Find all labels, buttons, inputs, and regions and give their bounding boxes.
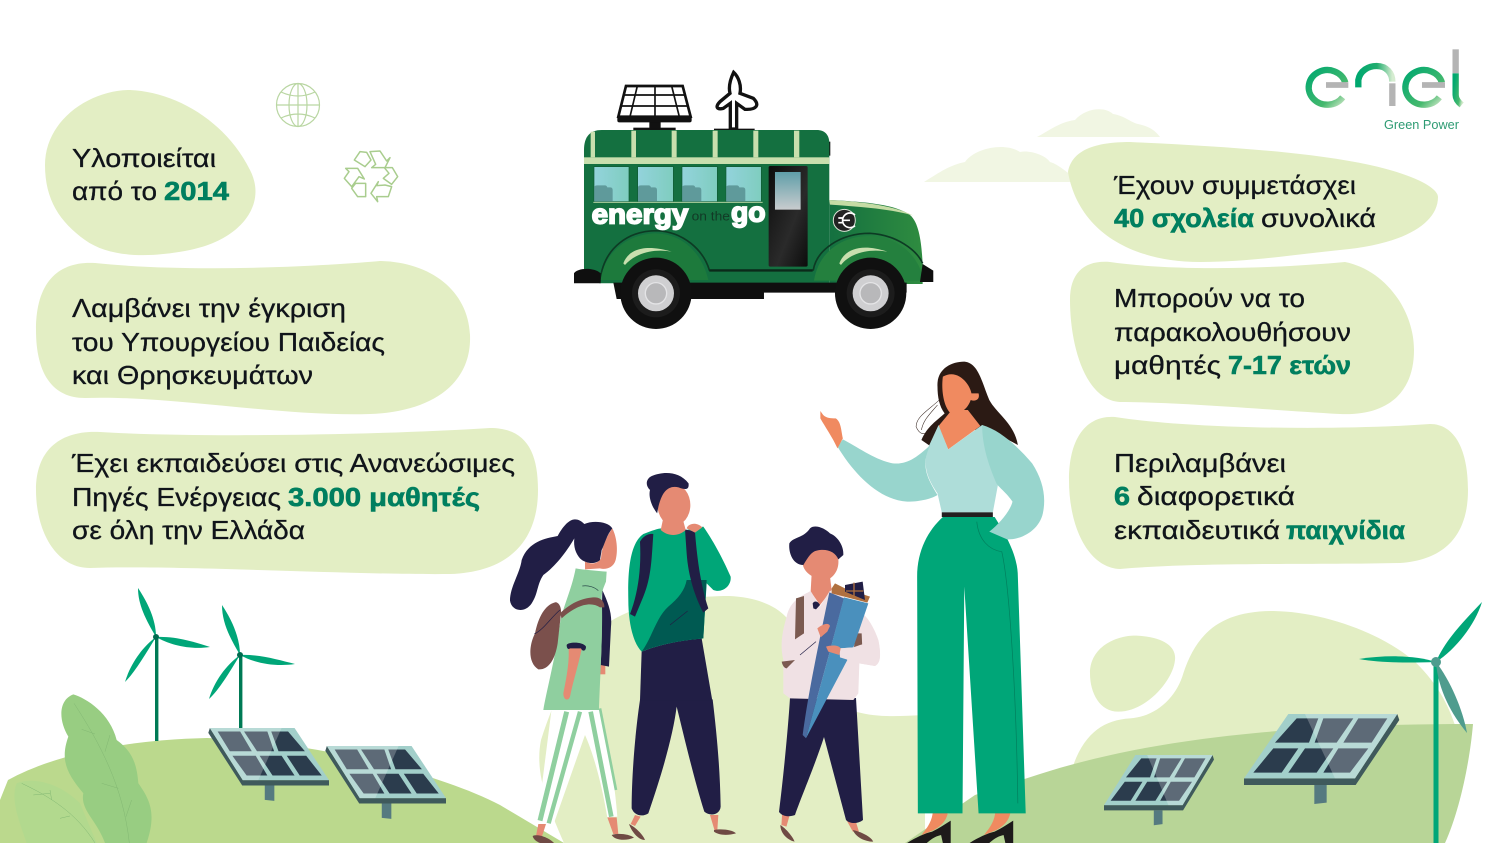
teacher feet: [907, 812, 1013, 843]
logo: enel Green Power: [1309, 49, 1462, 132]
panel: 6 games: [1069, 417, 1468, 569]
cloud upper: [1037, 109, 1160, 137]
teacher hair back: [921, 362, 1018, 447]
tall boy feet: [629, 815, 736, 840]
tall boy head: [647, 473, 690, 535]
tall boy sweater shade: [642, 580, 707, 652]
small panel: [1104, 755, 1214, 825]
text: 7-17 ετών: [1228, 350, 1351, 380]
right light blobs: [1072, 611, 1457, 777]
tall boy lower trousers: [632, 699, 721, 815]
text: από το: [72, 176, 157, 206]
teacher blouse: [926, 425, 998, 512]
teacher trousers: [917, 517, 1026, 813]
tall boy sweater: [628, 527, 731, 652]
bus lettering: [592, 197, 766, 229]
text: παρακολουθήσουν: [1114, 317, 1351, 347]
rear wheel: [620, 248, 692, 329]
bus door: [769, 166, 808, 267]
teacher hand: [820, 411, 843, 448]
blob: [36, 261, 470, 414]
icon: plug badge: [833, 209, 855, 231]
text: 6: [1114, 481, 1130, 511]
leaves: [14, 694, 152, 843]
small boy hair: [789, 527, 843, 565]
blob: [1069, 417, 1468, 569]
bus lettering: energy: [592, 198, 689, 229]
text: [1113, 170, 1376, 233]
small boy sleeve: [839, 640, 880, 666]
text: του Υπουργείου Παιδείας: [72, 327, 385, 357]
large panel: [1244, 714, 1399, 804]
front leaf: [61, 694, 152, 843]
text: Περιλαμβάνει: [1114, 448, 1286, 478]
panel A: [208, 728, 329, 801]
bus body: [584, 129, 923, 284]
blob: [45, 90, 255, 255]
logo tagline: Green Power: [1384, 118, 1459, 132]
text: [71, 448, 515, 545]
small boy hands: [817, 624, 841, 655]
right hill: [905, 724, 1473, 843]
small boy collar and straps: [782, 596, 862, 668]
text: Έχει εκπαιδεύσει στις Ανανεώσιμες: [71, 448, 515, 478]
left wind turbines: [125, 588, 295, 741]
girl arm: [563, 643, 586, 700]
background hills: [0, 596, 1473, 843]
text: Λαμβάνει την έγκριση: [72, 293, 346, 323]
bus chassis and bumpers: [574, 264, 933, 299]
bus lettering: on the: [692, 210, 730, 224]
girl shirt: [543, 568, 607, 710]
roof solar panel: [617, 86, 692, 130]
text: [1114, 283, 1351, 380]
small boy shirt: [782, 591, 880, 700]
teacher right arm: [982, 425, 1044, 539]
text: μαθητές: [1114, 350, 1221, 380]
tall boy upper trousers: [640, 638, 712, 701]
left hill: [0, 738, 564, 843]
tall boy backpack straps: [630, 529, 708, 617]
small boy trousers: [779, 698, 863, 823]
teacher belt: [942, 512, 993, 517]
text: εκπαιδευτικά: [1114, 515, 1280, 545]
left solar panels: [208, 728, 446, 819]
turbine 1: [125, 588, 210, 741]
teacher wisps: [916, 400, 939, 434]
legs and feet of girl and tall boy: [533, 699, 736, 843]
girl skin under jacket: [600, 665, 605, 674]
text: διαφορετικά: [1137, 481, 1295, 511]
text: Πηγές Ενέργειας: [72, 482, 281, 512]
gift boxes: [832, 582, 870, 603]
text: Υλοποιείται: [72, 143, 216, 173]
text: 3.000 μαθητές: [288, 482, 480, 512]
school cone: [803, 592, 868, 738]
text: σε όλη την Ελλάδα: [72, 515, 305, 545]
text: 2014: [164, 176, 230, 206]
girl backpack: [530, 597, 604, 669]
girl legs: [537, 708, 617, 825]
text: και Θρησκευμάτων: [72, 360, 313, 390]
small boy feet: [780, 813, 873, 842]
teacher neck and chest: [939, 410, 980, 449]
blob: [1070, 262, 1414, 414]
blob: [36, 428, 538, 574]
panel: 40 schools: [1068, 142, 1438, 262]
panel: 3000 students: [36, 428, 538, 574]
bus windows: [593, 167, 763, 202]
right wind turbine: [1359, 602, 1482, 843]
text: Έχουν συμμετάσχει: [1113, 170, 1356, 200]
panel: ministry approval: [36, 261, 470, 414]
roof wind turbine: [717, 72, 757, 129]
bus: energy on the go: [574, 72, 933, 329]
tall boy hand: [687, 524, 702, 533]
small boy upper body: [782, 527, 880, 738]
small boy face: [803, 549, 838, 581]
text: [72, 293, 385, 390]
teacher left arm: [837, 439, 937, 502]
clouds: [924, 109, 1160, 182]
text: Μπορούν να το: [1114, 283, 1305, 313]
girl feet: [533, 817, 634, 843]
small boy neck: [811, 573, 832, 605]
text: [1114, 448, 1405, 545]
front wheel: [835, 248, 906, 329]
text: συνολικά: [1261, 203, 1376, 233]
right solar panels: [1104, 714, 1399, 825]
text: 40 σχολεία: [1114, 203, 1254, 233]
bus lettering: go: [731, 197, 766, 228]
logo mark: [1309, 49, 1462, 106]
back leaf: [14, 781, 97, 843]
teacher: [820, 362, 1044, 843]
upper bodies of girl and tall boy: [510, 519, 731, 710]
teacher face: [942, 374, 979, 414]
people: [510, 362, 1044, 843]
icon: recycle: [344, 151, 398, 202]
light centre hill: [539, 596, 925, 843]
girl jacket: [601, 590, 611, 667]
cloud lower: [924, 147, 1082, 182]
panel: started in 2014: [45, 90, 255, 255]
turbine 2: [209, 605, 295, 730]
panel B: [325, 746, 446, 819]
text: παιχνίδια: [1286, 515, 1405, 545]
girl face and neck: [585, 528, 617, 569]
text: [72, 143, 230, 206]
panel: ages 7-17: [1070, 262, 1414, 414]
blob: [1068, 142, 1438, 262]
icon: globe: [276, 84, 320, 126]
girl hair: [510, 519, 612, 610]
